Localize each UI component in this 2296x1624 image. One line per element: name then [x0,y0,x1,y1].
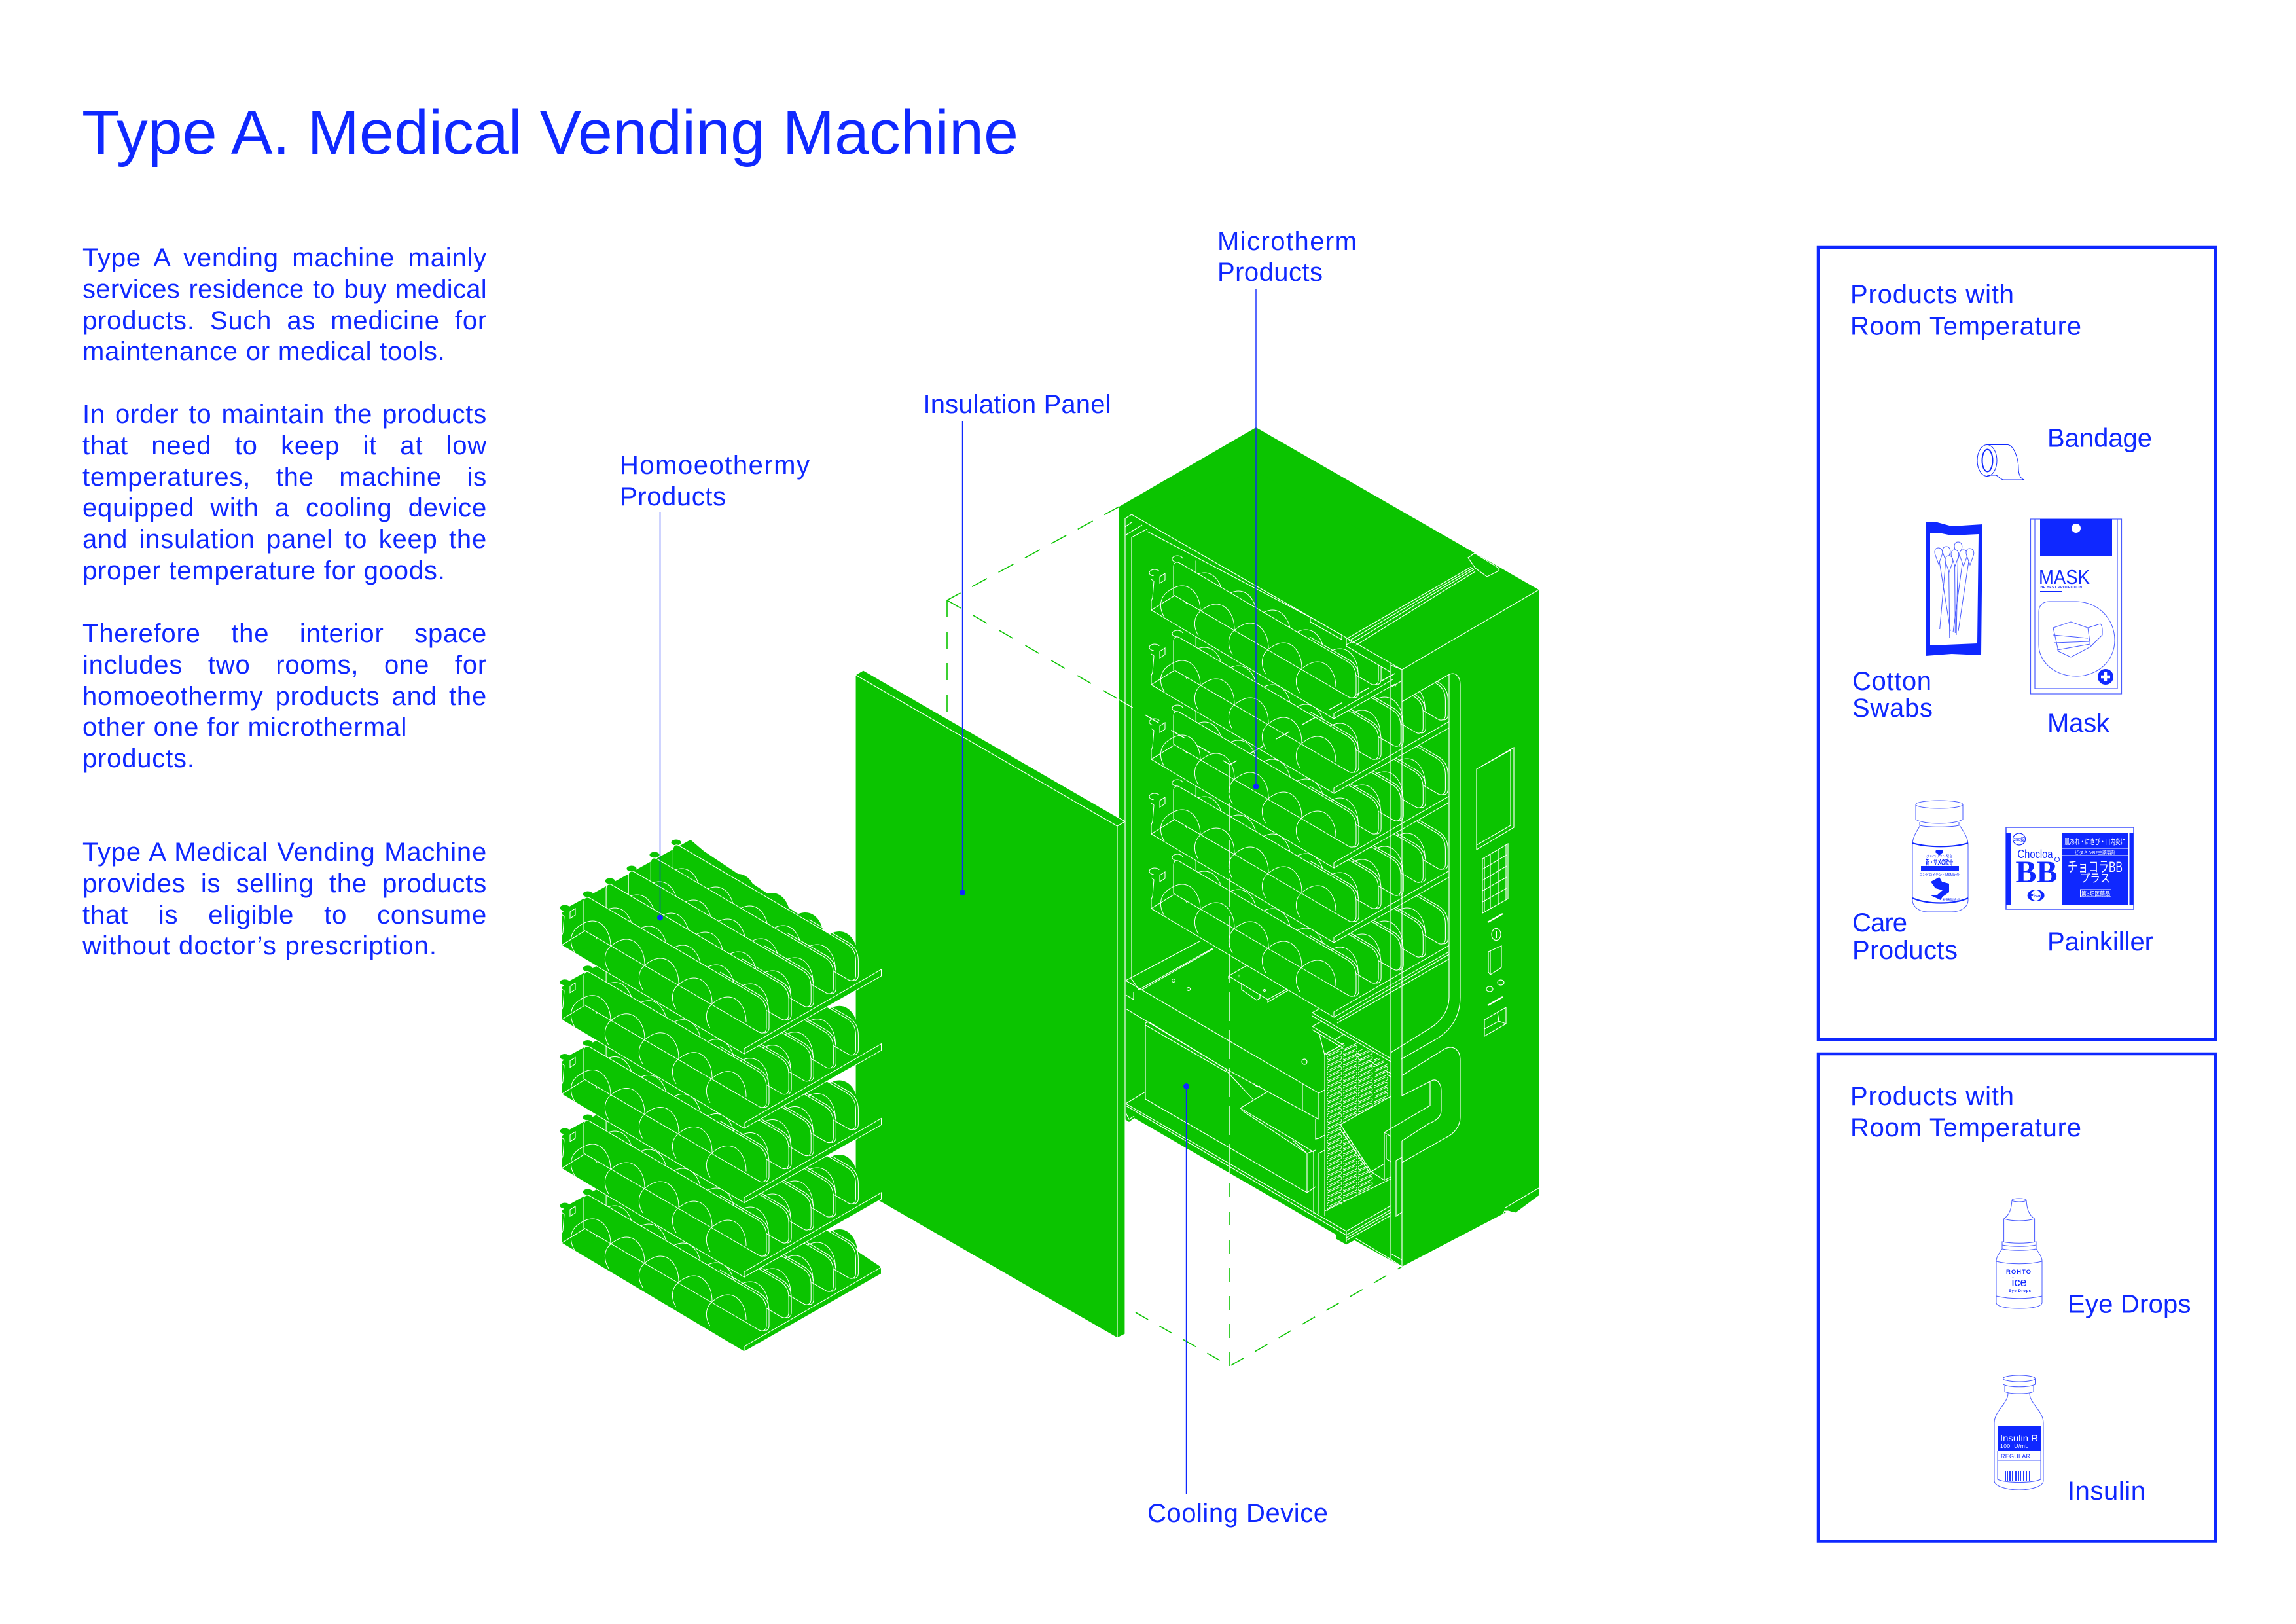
text block: cooling explanation: and insulation panel to keep the [82,525,487,554]
text block: cooling explanation: equipped with a cooling device [82,494,487,522]
machine body silhouette [1119,427,1539,1267]
icon: insulin vial: 100 IU/mL [2000,1443,2028,1449]
leader: cooling device [1183,1083,1189,1494]
icon: painkiller box: ビタミンB2主薬製剤 [2075,849,2115,856]
text block: prescription note: Type A Medical Vending Machine [82,838,487,867]
text block: interior rooms: includes two rooms, one for [82,651,487,679]
panel frame [1818,1054,2215,1541]
icon: care products bottle: コンドロイチン・MSM配合 [1919,873,1960,877]
icon: painkiller box: Chocloa [2017,848,2053,861]
icon: insulin vial [1994,1375,2043,1490]
lower chamber and cooling device linework [1126,941,1391,1242]
label: homoeothermy products: Homoeothermy [620,451,810,480]
label: mask: Mask [2047,709,2110,738]
bill reader [1488,946,1501,975]
icon: insulin vial: Insulin R [2000,1433,2038,1443]
text block: introduction [82,244,487,366]
icon: mask package: THE BEST PROTECTION [2038,586,2082,590]
text block: prescription note: provides is selling the products [82,869,487,898]
label: bandage: Bandage [2047,424,2152,453]
cabinet frame, door and top linework [1125,514,1539,1267]
panel heading: Room Temperature [1850,1113,2081,1142]
panel heading: Room Temperature [1850,312,2081,340]
label: cooling device: Cooling Device [1147,1499,1328,1528]
icon: care products bottle: 栄養補助食品 [1943,897,1960,902]
icon: painkiller box: BB [2016,855,2058,890]
label: care products: Care [1852,909,1907,937]
control panel on side of machine [1477,748,1514,1036]
icon: painkiller box: チョコラBB [2068,859,2123,875]
panel heading: Products with [1850,280,2014,309]
panel: low temperature products [1818,1054,2215,1541]
leader: microtherm products [1253,289,1259,789]
white dashed outline over machine [1119,670,1402,1174]
keypad [1482,844,1508,913]
insulation panel [855,670,1125,1338]
text block: cooling explanation: In order to maintain the products [82,400,487,429]
leader: insulation panel [960,421,965,895]
label: care products: Products [1852,936,1958,965]
label: eye drops: Eye Drops [2068,1290,2191,1318]
dispenser flap [1340,1096,1391,1181]
text block: cooling explanation: proper temperature for goods. [82,556,446,585]
title: Type A. Medical Vending Machine [82,98,1018,168]
text block: interior rooms: other one for microthermal [82,713,407,742]
coin slot [1488,914,1503,1005]
icon: painkiller box: 250錠 [2013,837,2025,842]
icon: insulin vial: REGULAR [2001,1453,2030,1460]
icon: painkiller box [2006,827,2134,909]
label: microtherm products: Microtherm [1217,227,1357,256]
label: painkiller: Painkiller [2047,928,2153,956]
label: microtherm products: Products [1217,258,1323,287]
text block: interior rooms: homoeothermy products and the [82,682,487,711]
buttons [1486,986,1493,992]
icon: care products bottle [1912,801,1968,912]
icon: care products bottle: 新・サメの軟骨 [1926,857,1953,867]
leader: homoeothermy products [657,512,663,920]
dashed volume outline behind machine [947,507,1402,1366]
text block: prescription note: that is eligible to consume [82,901,487,929]
display window [1477,748,1514,850]
label: insulation panel: Insulation Panel [923,390,1111,419]
icon: eye drops bottle: Eye Drops [2009,1290,2032,1293]
icon: eye drops bottle [1996,1199,2042,1308]
label: insulin: Insulin [2068,1477,2145,1506]
panel: room temperature products [1818,247,2215,1039]
icon: mask package [2030,519,2122,694]
label: cotton swabs: Swabs [1852,694,1933,723]
product trays inside machine [1149,555,1449,1018]
text block: introduction: products. Such as medicine for [82,306,487,335]
homoeothermy product trays [560,839,881,1352]
icon: eye drops bottle: ROHTO [2006,1269,2031,1276]
text block: introduction: Type A vending machine mainly [82,244,487,272]
icon: cotton swabs [1926,522,1982,656]
icon: painkiller box: 第3類医薬品 [2081,890,2110,897]
icon: mask package: MASK [2039,566,2090,588]
text block: interior rooms [82,619,487,773]
text block: interior rooms: Therefore the interior space [82,619,487,648]
text block: introduction: services residence to buy medical [82,275,487,304]
coin return [1484,1007,1506,1036]
text block: prescription note [82,838,487,960]
label: cotton swabs: Cotton [1852,667,1931,696]
panel frame [1818,247,2215,1039]
vent slots [1327,1042,1388,1211]
icon: painkiller box: プラス [2080,872,2110,885]
text block: interior rooms: products. [82,744,195,773]
vending machine [1119,427,1539,1267]
icon: care products bottle: グルコサミン配合 [1926,854,1952,859]
icon: painkiller box: Eisai [2030,893,2041,899]
label: homoeothermy products: Products [620,482,726,511]
text block: introduction: maintenance or medical tools. [82,337,446,366]
text block: cooling explanation: temperatures, the machine is [82,463,487,492]
icon: bandage [1977,445,2024,480]
panel heading: Products with [1850,1082,2014,1111]
icon: painkiller box: 肌あれ・にきび・口内炎に [2064,837,2126,846]
text block: cooling explanation: that need to keep it at low [82,431,487,460]
text block: prescription note: without doctor’s prescription. [82,931,437,960]
cabinet ceiling [1132,471,1466,702]
icon: eye drops bottle: ice [2012,1276,2026,1289]
text block: cooling explanation [82,400,487,585]
